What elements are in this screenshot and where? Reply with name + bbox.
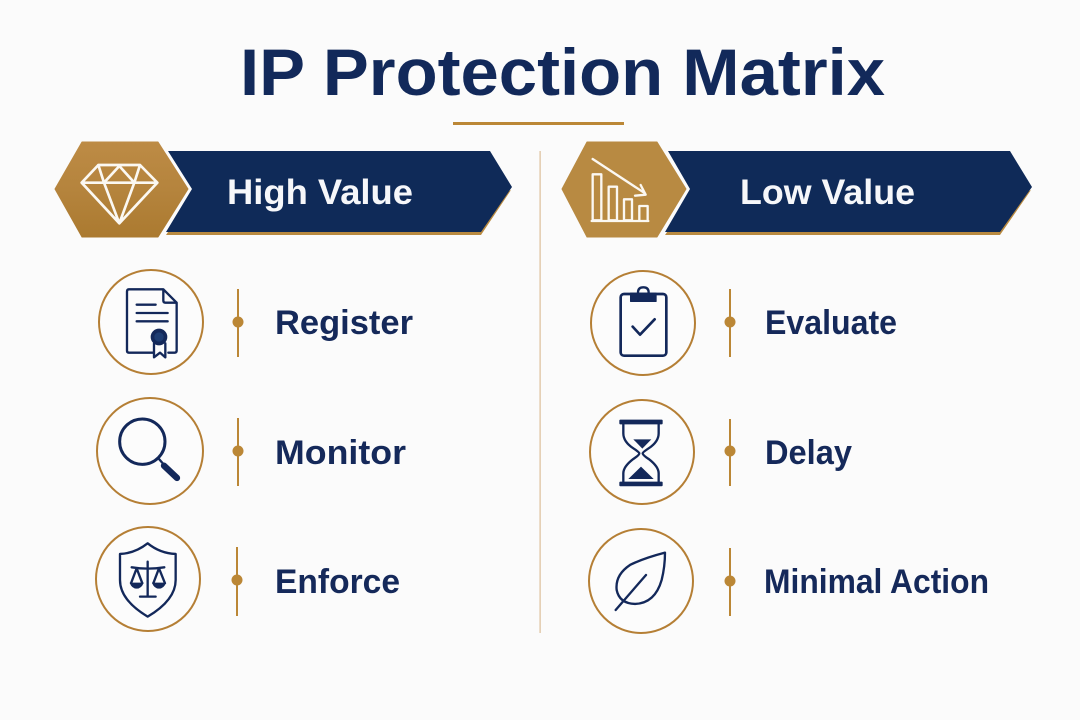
icon: hourglass	[619, 420, 663, 486]
banner text: High Value	[227, 173, 413, 212]
label: Delay	[765, 434, 852, 472]
label: Monitor	[275, 434, 406, 472]
title: IP Protection Matrix	[240, 35, 885, 109]
icon: declining chart hexagon	[562, 142, 686, 237]
center divider	[540, 151, 541, 633]
header banner: low value	[665, 151, 1032, 235]
connector	[724, 289, 736, 357]
row: minimal action	[589, 529, 989, 633]
connector	[232, 289, 244, 357]
row: register	[99, 270, 413, 374]
label: Enforce	[275, 563, 400, 601]
header banner: high value	[166, 151, 512, 235]
label: Minimal Action	[764, 563, 989, 601]
icon: magnifying glass	[120, 419, 177, 478]
label: Evaluate	[765, 304, 897, 342]
panel: high value	[55, 142, 512, 631]
icon: diamond hexagon	[55, 142, 188, 237]
banner text: Low Value	[740, 173, 915, 212]
panel: low value	[562, 142, 1032, 633]
connector	[724, 419, 736, 486]
row: delay	[590, 400, 852, 504]
title underline	[453, 122, 624, 125]
label: Register	[275, 304, 413, 342]
row: evaluate	[591, 271, 897, 375]
row: monitor	[97, 398, 406, 504]
connector	[232, 547, 242, 616]
icon: shield with scales	[120, 543, 176, 617]
row: enforce	[96, 527, 400, 631]
icon: clipboard with check	[621, 287, 666, 356]
connector	[232, 418, 244, 486]
icon: leaf	[616, 553, 665, 610]
icon: certificate document	[127, 289, 177, 357]
connector	[724, 548, 736, 616]
